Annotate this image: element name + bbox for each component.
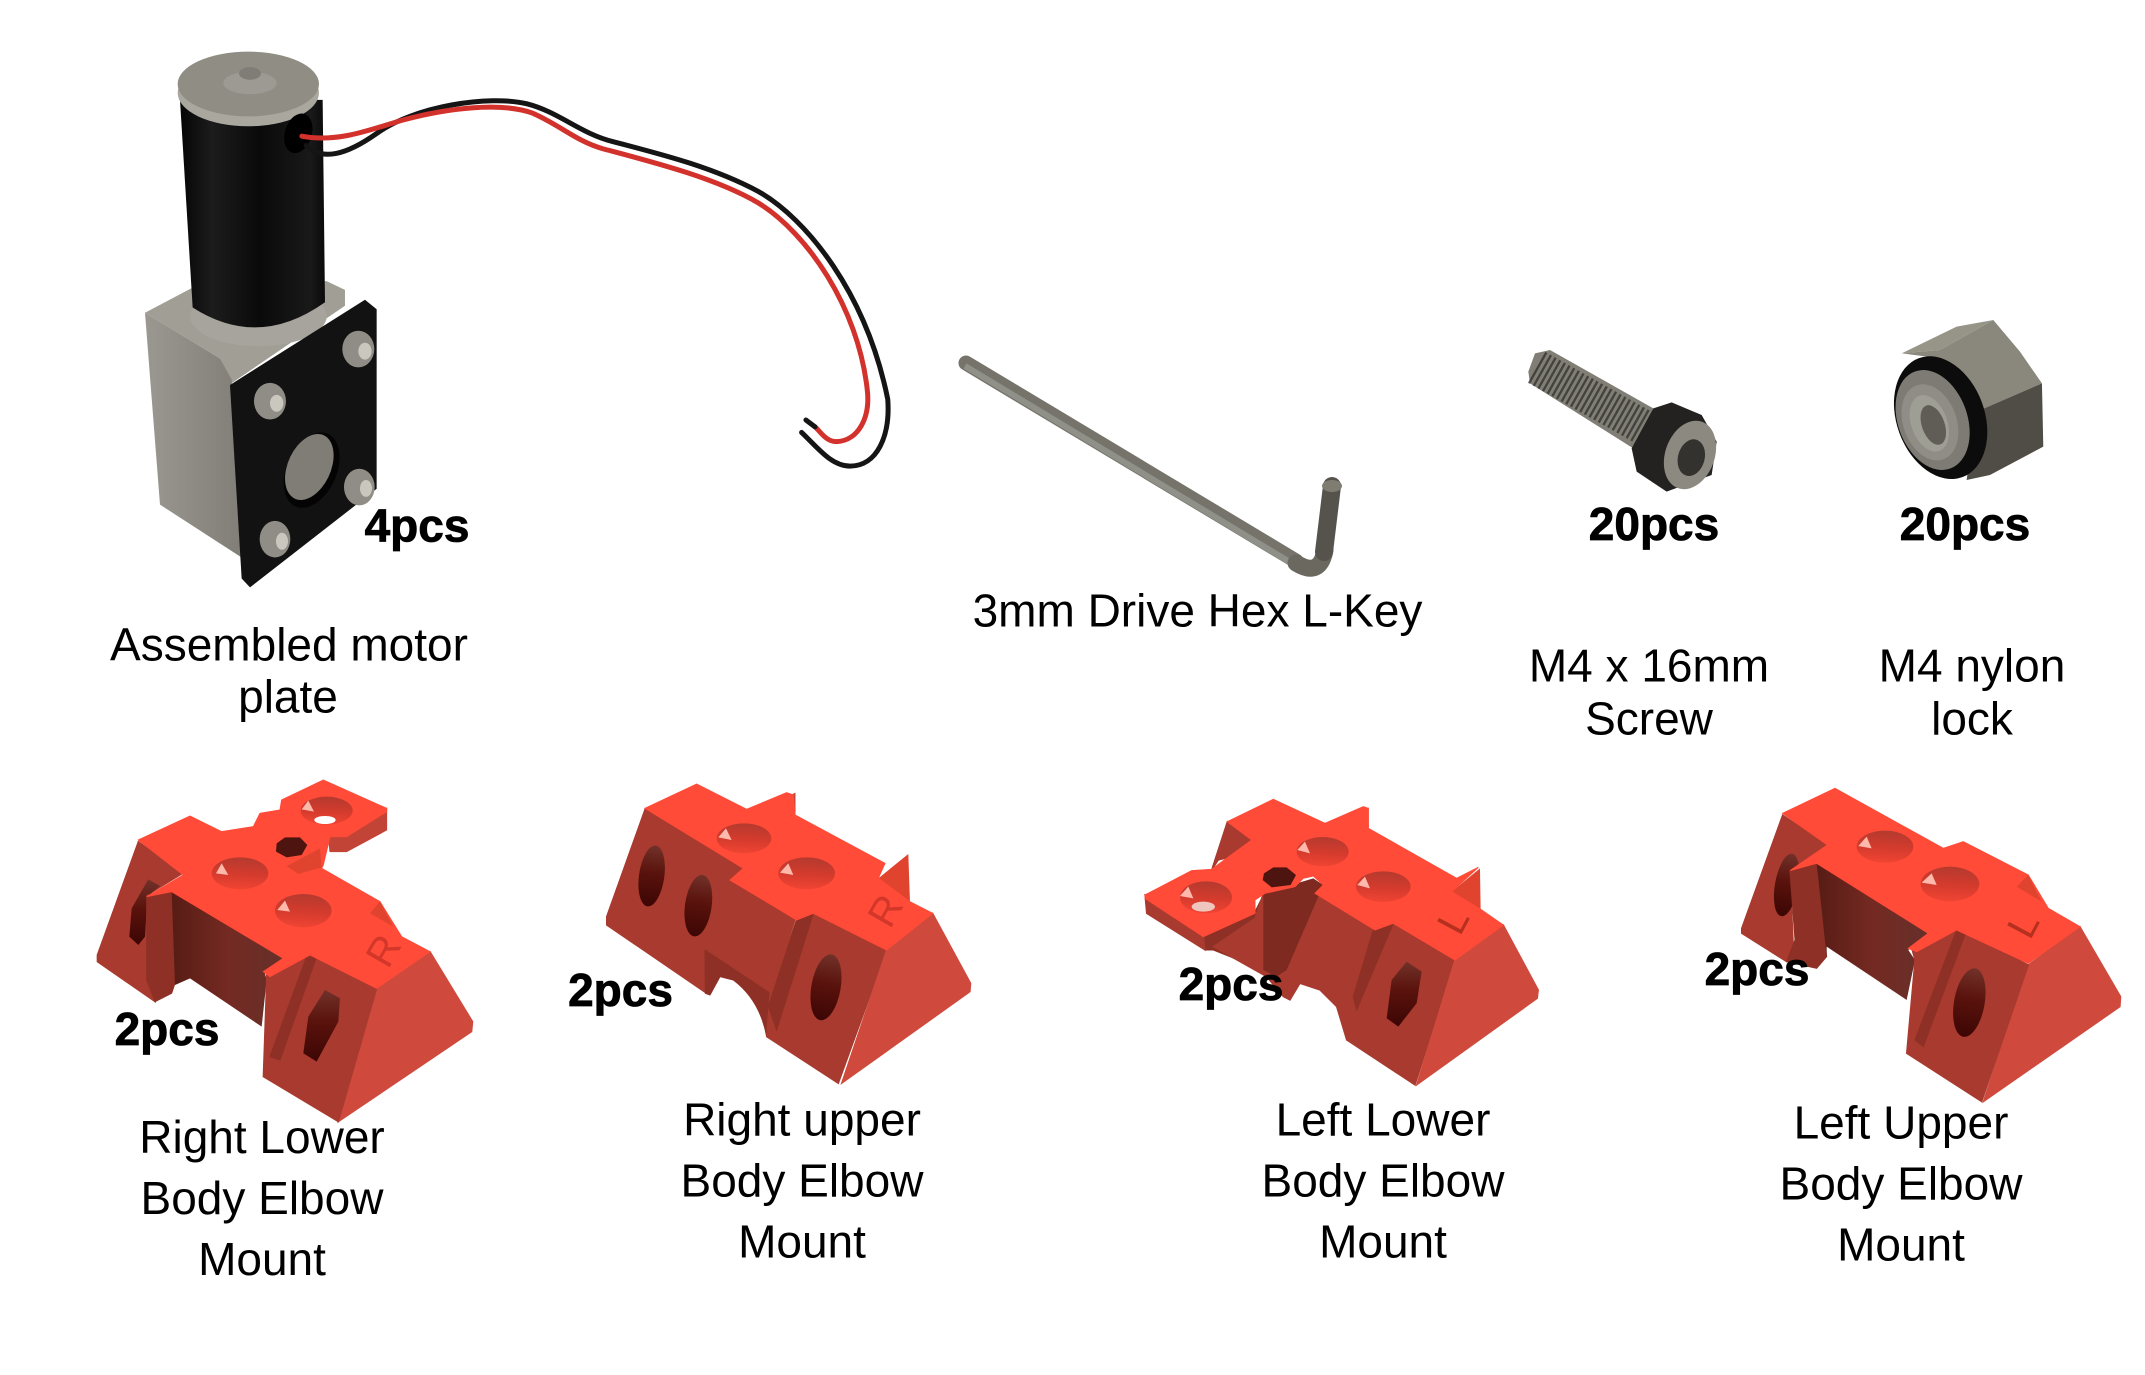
label: left lower mount: Body Elbow <box>1262 1154 1505 1206</box>
icon: left upper elbow mount: L <box>1999 905 2048 945</box>
icon: left upper elbow mount <box>1742 788 2121 1102</box>
label: right upper mount: Body Elbow <box>681 1154 924 1206</box>
icon: M4 screw <box>1528 350 1725 497</box>
label: left lower mount: Mount <box>1319 1216 1447 1268</box>
label: right lower mount: Body Elbow <box>141 1172 384 1224</box>
quantity label: motor: 4pcs <box>365 500 469 552</box>
quantity label: left upper: 2pcs <box>1705 943 1809 995</box>
label: hex L-key: 3mm Drive Hex L-Key <box>973 584 1422 636</box>
icon: right upper elbow mount: R <box>860 887 912 934</box>
label: right upper mount: Right upper <box>683 1094 921 1146</box>
icon: right lower elbow mount: R <box>358 927 410 974</box>
icon: hex L-key <box>965 363 1342 568</box>
label: left lower mount: Left Lower <box>1276 1094 1490 1146</box>
quantity label: right upper: 2pcs <box>568 964 673 1016</box>
label: M4 screw: M4 x 16mm <box>1529 640 1769 692</box>
label: right lower mount: Right Lower <box>139 1111 385 1163</box>
label: left upper mount: Mount <box>1837 1218 1965 1270</box>
label: M4 screw: Screw <box>1585 692 1714 744</box>
label: assembled motor plate: Assembled motor <box>110 618 468 670</box>
quantity label: nuts: 20pcs <box>1900 498 2030 550</box>
icon: right lower elbow mount <box>97 780 473 1122</box>
label: left upper mount: Body Elbow <box>1780 1158 2023 1210</box>
icon: right upper elbow mount <box>607 784 971 1083</box>
label: right upper mount: Mount <box>738 1216 866 1268</box>
icon: M4 nylon lock nut <box>1878 320 2043 492</box>
label: left upper mount: Left Upper <box>1794 1096 2008 1148</box>
label: right lower mount: Mount <box>198 1233 326 1285</box>
icon: left lower elbow mount: L <box>1429 901 1478 941</box>
label: M4 nylon lock: lock <box>1931 692 2014 744</box>
quantity label: right lower: 2pcs <box>115 1003 219 1055</box>
quantity label: left lower: 2pcs <box>1179 958 1283 1010</box>
label: M4 nylon lock: M4 nylon <box>1879 640 2065 692</box>
icon: assembled motor plate <box>145 52 888 587</box>
quantity label: screws: 20pcs <box>1589 498 1719 550</box>
icon: left lower elbow mount <box>1145 799 1538 1085</box>
label: assembled motor plate: plate <box>238 670 338 722</box>
